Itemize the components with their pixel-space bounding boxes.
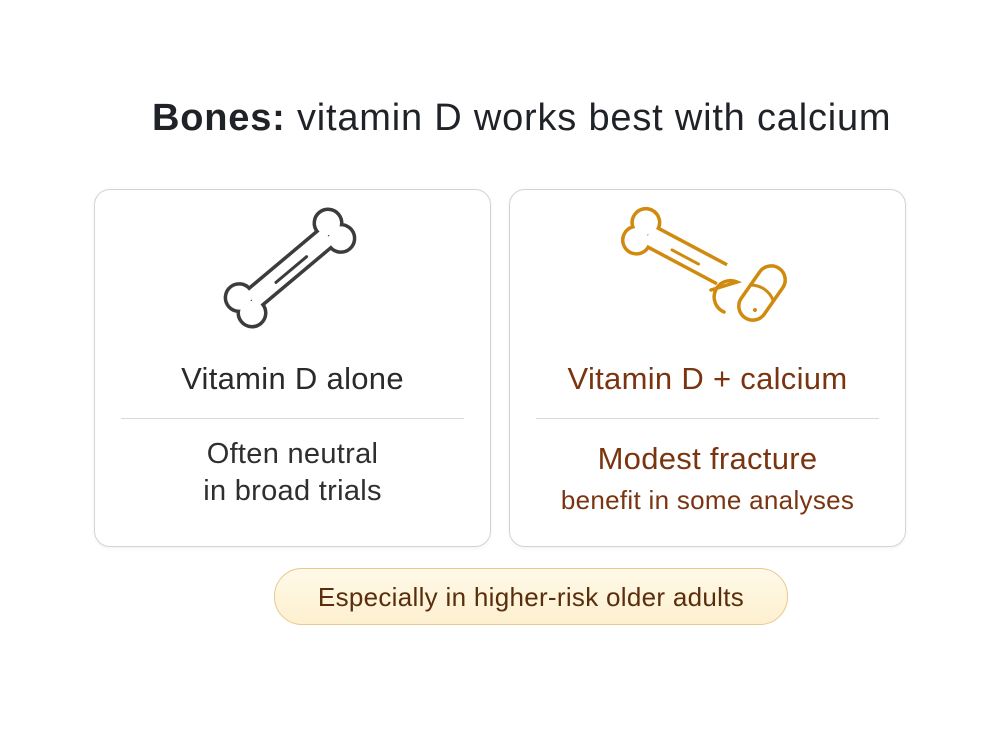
panel: vitamin D + calcium: benefit in some analyses: [561, 485, 854, 515]
icon: bone with calcium pill: [620, 206, 787, 322]
callout: Especially in higher-risk older adults: [318, 582, 744, 612]
title: Bones: vitamin D works best with calcium: [152, 97, 891, 139]
icon: bone: [224, 208, 356, 328]
heading: Vitamin D + calcium: [568, 361, 847, 396]
text block: [203, 438, 382, 507]
panel: vitamin D + calcium: [509, 189, 906, 547]
text block: Modest fracture: [598, 441, 817, 476]
text block: Often neutral: [207, 438, 378, 470]
text block: in broad trials: [203, 475, 382, 507]
heading: Vitamin D alone: [181, 361, 404, 396]
panel: vitamin D alone: [94, 189, 491, 547]
callout: [274, 568, 788, 625]
